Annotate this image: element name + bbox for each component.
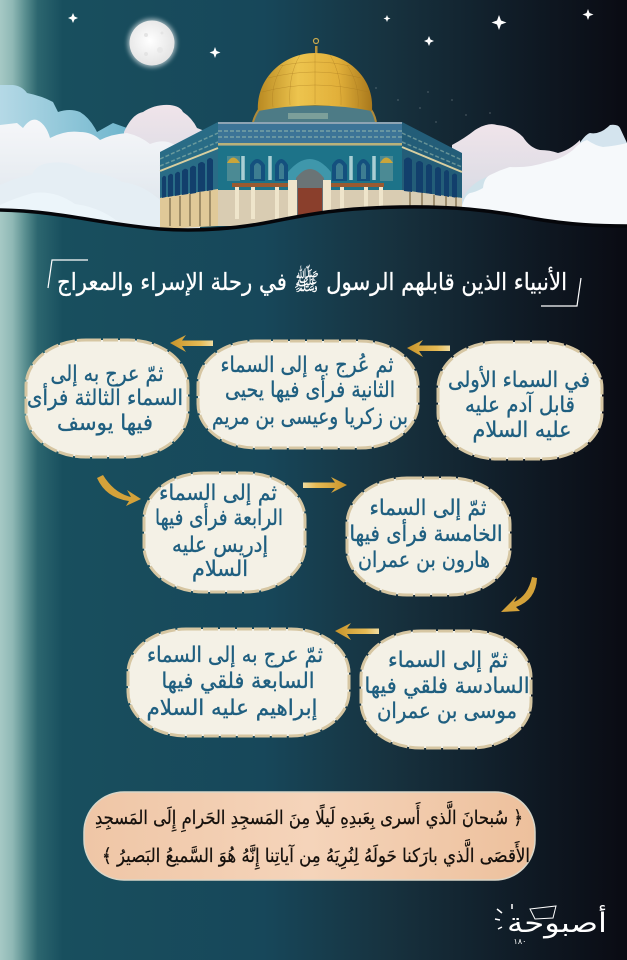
bubble 7: [128, 629, 349, 736]
bubble 3: [26, 340, 188, 457]
arrow 4: [303, 477, 347, 493]
bubble 4: هارون بن عمران: [358, 548, 490, 573]
title bracket: right: [541, 278, 581, 306]
bubble 3: فيها يوسف: [57, 411, 153, 436]
bubble 6: ثمّ إلى السماء: [388, 648, 508, 673]
bubble 1: قابل آدم عليه: [465, 391, 575, 418]
logo: أصبوحة: [507, 904, 607, 939]
bubble 5: إدريس عليه: [172, 533, 268, 558]
logo: [495, 904, 607, 946]
bubble 2: [198, 341, 418, 448]
arrow 6: [335, 623, 379, 640]
bubble 7: إبراهيم عليه السلام: [146, 696, 318, 721]
wave divider: [0, 207, 627, 262]
side arches: [162, 158, 457, 198]
logo: ١٨٠: [514, 937, 526, 946]
bubble 5: ثم إلى السماء: [159, 481, 277, 506]
Dome of the Rock: [160, 38, 462, 229]
moon: [128, 18, 176, 68]
arrow 2: [170, 335, 213, 352]
quran verse panel: [84, 792, 535, 880]
arrow 3: [97, 475, 141, 506]
bubble 6: موسى بن عمران: [377, 699, 517, 724]
bubble 7: السابعة فلقي فيها: [162, 669, 314, 694]
bubble 5: الرابعة فرأى فيها: [155, 503, 283, 531]
gold side panels: [227, 156, 393, 181]
clouds right: [452, 124, 627, 236]
bubble 2: الثانية فرأى فيها يحيى: [225, 375, 395, 403]
title: الأنبياء الذين قابلهم الرسول ﷺ في رحلة الإسراء والمعراج: [57, 264, 567, 296]
stars: [68, 9, 594, 123]
left face: [160, 122, 218, 229]
bubble 5: السلام: [192, 557, 248, 582]
columns: [235, 180, 383, 219]
drum: [253, 106, 376, 122]
bubble 1: [438, 342, 602, 459]
arrow 1: [407, 340, 450, 357]
bubble 3: السماء الثالثة فرأى: [27, 383, 183, 411]
side column shadows: [170, 191, 456, 226]
portico: [232, 159, 384, 220]
golden dome: [258, 53, 372, 111]
quran verse panel: ﴿ سُبحانَ الَّذي أَسرى بِعَبدِهِ لَيلًا مِنَ المَسجِدِ الحَرامِ إِلَى المَسجِدِ: [95, 800, 523, 833]
bubble 1: في السماء الأولى: [448, 366, 590, 393]
bubble 1: عليه السلام: [472, 418, 572, 443]
quran verse panel: الأَقصَى الَّذي بارَكنا حَولَهُ لِنُرِيَهُ مِن آياتِنا إِنَّهُ هُوَ السَّميعُ البَصيرُ ﴾: [102, 838, 530, 870]
title bracket: left: [48, 260, 88, 288]
bubble 5: [144, 473, 305, 592]
bubble 4: الخامسة فرأى فيها: [350, 519, 502, 547]
arrow 5: [501, 577, 537, 612]
stone base: [218, 190, 402, 226]
upper frieze front: [218, 122, 402, 146]
bubble 2: ثم عُرج به إلى السماء: [220, 353, 394, 378]
bubble 4: [347, 478, 510, 595]
finial: [314, 38, 318, 54]
clouds left: [0, 85, 215, 236]
bubble 6: السادسة فلقي فيها: [364, 674, 530, 699]
bubble 6: [361, 631, 531, 748]
front arched panels: [250, 159, 370, 181]
bubble 2: بن زكريا وعيسى بن مريم: [212, 405, 408, 430]
bubble 7: ثمّ عرج به إلى السماء: [147, 643, 323, 668]
bubble 3: ثمّ عرج به إلى: [50, 362, 164, 387]
bubble 4: ثمّ إلى السماء: [370, 496, 486, 521]
teal wall: [218, 145, 402, 191]
right face: [402, 122, 462, 226]
